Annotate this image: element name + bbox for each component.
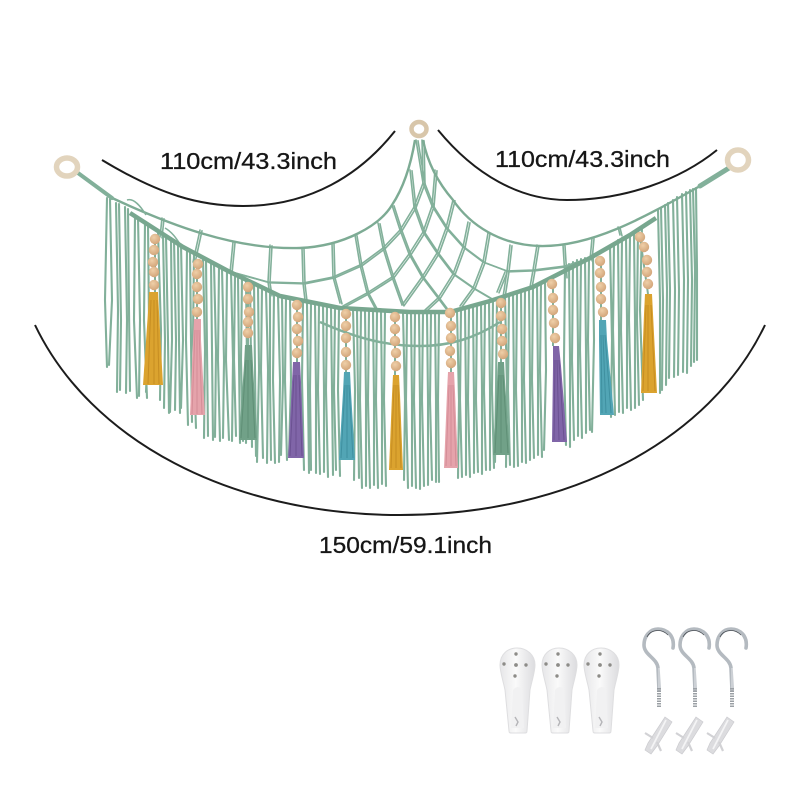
tassel strand 2 pink: [190, 259, 205, 415]
net lattice: [160, 140, 620, 310]
wooden ring right: [728, 150, 748, 170]
macrame net wall hanging: [56, 122, 748, 489]
wooden ring centre: [412, 122, 426, 136]
wall hook 3: [584, 648, 619, 733]
accessories: white wall hooks: [500, 648, 619, 733]
wall plug 3: [707, 717, 734, 754]
tassel strand 10 teal: [595, 256, 614, 415]
left rope end: [78, 173, 112, 198]
lower knotted rope: [130, 213, 656, 312]
top rope: [110, 140, 700, 248]
label: left top width: 110cm/43.3inch: [160, 148, 337, 174]
accessories: wall plugs: [645, 717, 734, 754]
wall plug 1: [645, 717, 672, 754]
tassel strand 6 yellow: [389, 312, 403, 470]
fringe strands: [105, 188, 697, 489]
wooden ring left: [56, 158, 78, 176]
tassel strand 3 green: [239, 282, 257, 440]
tassel strand 9 purple: [547, 279, 567, 442]
wall plug 2: [676, 717, 703, 754]
accessories: screw eye hooks: [644, 629, 746, 708]
eye hook 1: [644, 629, 673, 708]
tassel strand 8 green: [493, 298, 510, 455]
secondary rope behind fringe: [320, 322, 500, 346]
eye hook 3: [717, 629, 746, 708]
eye hook 2: [680, 629, 709, 708]
tassel strand 7 pink: [444, 308, 458, 468]
label: right top width: 110cm/43.3inch: [495, 146, 670, 172]
tassel strand 5 teal: [339, 309, 355, 460]
dimension arc: top right: [438, 130, 717, 200]
dimension arc: top left: [102, 131, 395, 206]
stray loose cords at upper left: [127, 200, 180, 244]
right rope end: [700, 168, 729, 186]
tassel strand 11 yellow: [635, 232, 657, 393]
tassel strand 1 yellow: [143, 234, 163, 385]
wall hook 1: [500, 648, 535, 733]
dimension arc: bottom width: [35, 325, 765, 515]
wall hook 2: [542, 648, 577, 733]
label: bottom width: 150cm/59.1inch: [319, 532, 492, 558]
tassel strand 4 purple: [288, 300, 304, 458]
